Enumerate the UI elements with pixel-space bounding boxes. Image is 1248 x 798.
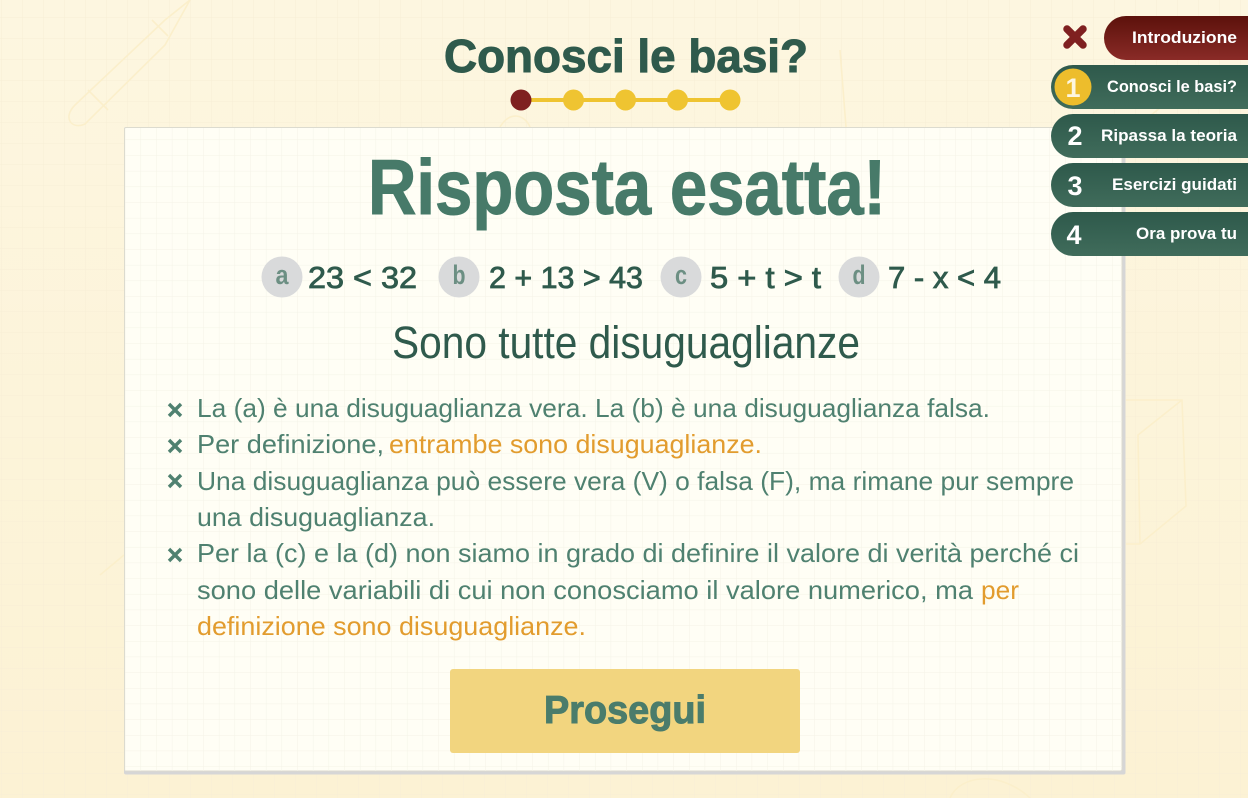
nav: Conosci le basi? bbox=[1051, 65, 1248, 109]
nav: Ora prova tu: 4 bbox=[1066, 220, 1082, 250]
expression d bbox=[838, 256, 1001, 298]
nav: Conosci le basi?: 1 bbox=[1065, 73, 1081, 103]
heading: correct answer: Risposta esatta! bbox=[368, 143, 886, 231]
bullet 4: per bbox=[981, 575, 1019, 605]
nav: Esercizi guidati: 3 bbox=[1067, 171, 1083, 201]
bullet 2: entrambe sono disuguaglianze. bbox=[389, 429, 762, 459]
bullet 2: Per definizione, bbox=[197, 429, 384, 459]
nav: Conosci le basi?: Conosci le basi? bbox=[1107, 78, 1237, 96]
expression b: b bbox=[452, 260, 466, 290]
expression b bbox=[438, 256, 643, 298]
nav: Ripassa la teoria: Ripassa la teoria bbox=[1101, 127, 1238, 145]
bullet 4 bbox=[169, 538, 1079, 641]
bullet 3 bbox=[169, 466, 1074, 532]
expression d: d bbox=[852, 260, 866, 290]
bullet 3: Una disuguaglianza può essere vera (V) o falsa (F), ma rimane pur sempre bbox=[197, 466, 1074, 496]
title: Conosci le basi? bbox=[444, 30, 808, 82]
button: continue bbox=[450, 669, 800, 753]
bullet 3: una disuguaglianza. bbox=[197, 502, 435, 532]
expression a: a bbox=[276, 260, 289, 290]
nav: Introduzione: Introduzione bbox=[1132, 29, 1237, 47]
expression d: 7 - x < 4 bbox=[888, 260, 1001, 295]
subheading: Sono tutte disuguaglianze bbox=[392, 317, 860, 368]
bullet 4: Per la (c) e la (d) non siamo in grado di definire il valore di verità perché ci bbox=[197, 538, 1079, 568]
nav: Ripassa la teoria bbox=[1051, 114, 1248, 158]
explanation list bbox=[169, 393, 1079, 641]
bullet 4: definizione sono disuguaglianze. bbox=[197, 611, 586, 641]
expression b: 2 + 13 > 43 bbox=[489, 260, 643, 295]
nav: Ora prova tu: Ora prova tu bbox=[1136, 225, 1237, 243]
nav: Esercizi guidati bbox=[1051, 163, 1248, 207]
nav: Ora prova tu bbox=[1051, 212, 1248, 256]
expression c: 5 + t > t bbox=[710, 260, 821, 295]
nav: Ripassa la teoria: 2 bbox=[1067, 121, 1083, 151]
expression a bbox=[262, 256, 417, 298]
panel: answer card bbox=[124, 127, 1126, 774]
nav: Esercizi guidati: Esercizi guidati bbox=[1112, 176, 1237, 194]
bullet 2 bbox=[169, 429, 762, 459]
expression c: c bbox=[675, 260, 687, 290]
bullet 4: sono delle variabili di cui non conosciamo il valore numerico, ma bbox=[197, 575, 974, 605]
bullet 1: La (a) è una disuguaglianza vera. La (b) è una disuguaglianza falsa. bbox=[197, 393, 990, 423]
expression c bbox=[660, 256, 821, 298]
button: continue: Prosegui bbox=[544, 689, 706, 732]
progress indicator bbox=[510, 90, 740, 110]
nav: Introduzione bbox=[1104, 16, 1248, 60]
expression a: 23 < 32 bbox=[308, 260, 417, 295]
icon: close bbox=[1067, 29, 1083, 45]
